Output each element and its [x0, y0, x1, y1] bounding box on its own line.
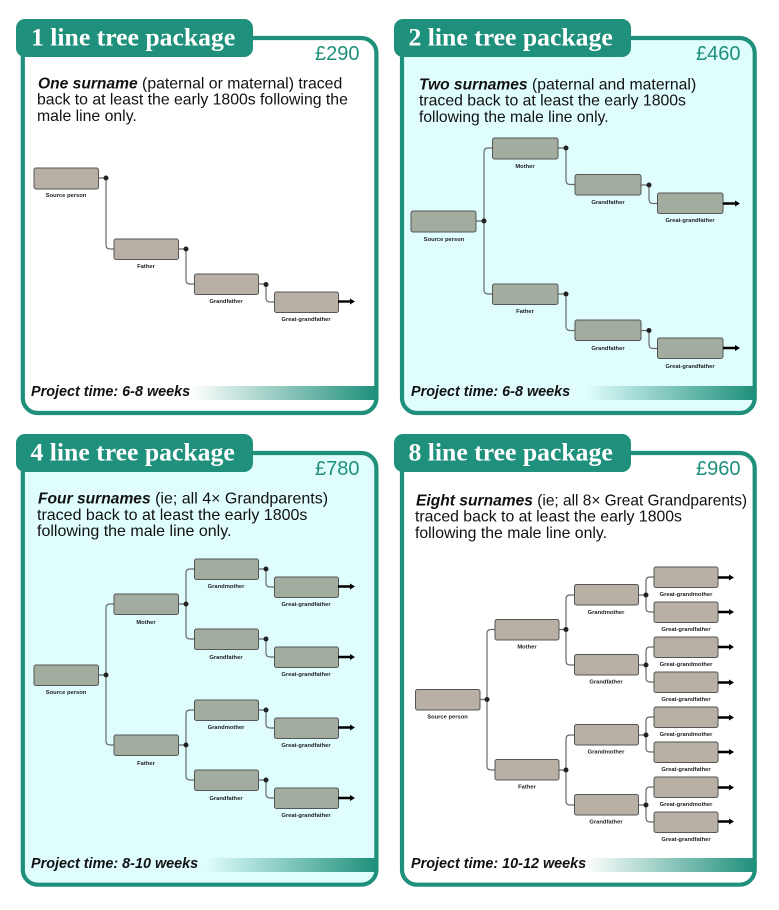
arrows [718, 574, 734, 824]
person: great-grandmother: Great-grandmother [660, 592, 713, 598]
person: father [492, 284, 558, 315]
heading tab: 2 line tree package [408, 22, 613, 52]
person: father [114, 239, 178, 270]
heading tab: 8 line tree package [408, 438, 613, 466]
person: source [416, 690, 480, 720]
description: Four surnames (ie; all 4× Grandparents) [38, 490, 328, 508]
panel: 2 line tree package [394, 19, 755, 413]
person: grandmother: Grandmother [208, 725, 245, 731]
person: mother: Mother [136, 620, 156, 626]
person: source: Source person [427, 714, 468, 720]
project time: Project time: 10-12 weeks [411, 856, 586, 872]
person: great-grandmother: Great-grandmother [660, 802, 713, 808]
description: back to at least the early 1800s following the [37, 92, 348, 108]
arrows [723, 200, 740, 351]
person: source [34, 665, 98, 696]
person: great-grandfather: Great-grandfather [665, 218, 715, 224]
person: great-grandfather: Great-grandfather [281, 672, 331, 678]
person: mother [495, 620, 559, 650]
person: mother [114, 594, 178, 626]
description: male line only. [37, 108, 137, 125]
arrow [338, 298, 355, 304]
person: grandfather [575, 320, 641, 352]
person: great-grandfather: Great-grandfather [661, 697, 711, 703]
person: grandfather [194, 629, 258, 661]
price: £290 [315, 43, 360, 65]
person: great-grandfather [274, 718, 338, 749]
heading tab [16, 434, 253, 472]
person: great-grandfather: Great-grandfather [281, 317, 331, 323]
description: One surname (paternal or maternal) traced [38, 76, 342, 92]
gradient bar [190, 386, 377, 400]
person: source [34, 168, 98, 199]
person: great-grandmother [654, 637, 718, 668]
person: grandfather: Grandfather [591, 346, 625, 352]
project time: Project time: 6-8 weeks [411, 384, 570, 400]
panel frame [23, 453, 376, 885]
person: great-grandmother [654, 567, 718, 598]
tree diagram [34, 168, 355, 323]
price: £780 [315, 458, 360, 480]
person: grandfather: Grandfather [589, 680, 623, 686]
person: source: Source person [46, 193, 87, 199]
person: great-grandfather [274, 647, 338, 678]
person: great-grandfather [274, 577, 338, 608]
person: great-grandmother [654, 777, 718, 808]
person: great-grandmother [654, 707, 718, 738]
person: grandmother: Grandmother [588, 750, 625, 756]
panel frame [402, 38, 755, 413]
person: father: Father [137, 264, 156, 270]
person: great-grandfather [658, 193, 723, 224]
person: great-grandfather [654, 672, 718, 703]
heading tab [394, 434, 631, 472]
price: £960 [696, 458, 740, 480]
person: mother: Mother [515, 164, 535, 170]
person: great-grandfather: Great-grandfather [661, 837, 711, 843]
price: £460 [696, 43, 740, 65]
person: grandfather [194, 770, 258, 802]
person: great-grandmother: Great-grandmother [660, 662, 713, 668]
person: great-grandfather [654, 602, 718, 633]
person: great-grandfather [274, 788, 338, 819]
person: father: Father [516, 309, 535, 315]
description: Eight surnames (ie; all 8× Great Grandparents) [416, 492, 747, 510]
person: father: Father [518, 784, 537, 790]
panel: 1 line tree package [16, 19, 377, 413]
person: source [411, 211, 476, 243]
description: traced back to at least the early 1800s [37, 507, 307, 524]
description: following the male line only. [37, 523, 231, 540]
description: Two surnames (paternal and maternal) [419, 76, 696, 94]
heading tab: 4 line tree package [30, 438, 235, 466]
person: grandmother [194, 700, 258, 731]
person: grandfather [194, 274, 258, 305]
person: great-grandfather: Great-grandfather [661, 767, 711, 773]
person: grandfather [574, 654, 638, 686]
description: following the male line only. [419, 109, 609, 126]
person: great-grandfather [654, 742, 718, 773]
person: father: Father [137, 761, 156, 767]
description: traced back to at least the early 1800s [419, 92, 686, 110]
gradient bar [585, 386, 755, 400]
person: great-grandfather [658, 338, 723, 370]
person: mother [492, 138, 558, 170]
project time: Project time: 6-8 weeks [31, 384, 190, 400]
panel frame [402, 453, 755, 885]
person: grandfather [575, 174, 641, 206]
person: grandfather: Grandfather [209, 796, 243, 802]
description: following the male line only. [415, 525, 607, 542]
person: grandfather: Grandfather [589, 820, 623, 826]
person: father [495, 760, 559, 790]
person: source: Source person [424, 237, 465, 243]
arrows [338, 584, 355, 801]
person: father [114, 735, 178, 767]
person: great-grandfather: Great-grandfather [665, 364, 715, 370]
tree diagram [411, 138, 740, 370]
person: grandmother [194, 559, 258, 590]
person: grandmother: Grandmother [588, 610, 625, 616]
person: source: Source person [46, 690, 87, 696]
heading tab: 1 line tree package [31, 22, 235, 52]
person: grandfather [574, 794, 638, 826]
panel: 4 line tree package [16, 434, 377, 885]
person: mother: Mother [517, 644, 537, 650]
gradient bar [585, 858, 755, 872]
project time: Project time: 8-10 weeks [31, 856, 198, 872]
gradient bar [205, 858, 377, 872]
person: grandmother: Grandmother [208, 584, 245, 590]
person: great-grandfather: Great-grandfather [281, 813, 331, 819]
person: grandmother [574, 584, 638, 616]
panel: 8 line tree package [394, 434, 755, 885]
heading tab [394, 19, 631, 57]
tree diagram [416, 567, 734, 843]
tree diagram [34, 559, 355, 819]
description: traced back to at least the early 1800s [415, 508, 682, 526]
person: grandfather: Grandfather [209, 655, 243, 661]
person: great-grandfather: Great-grandfather [281, 602, 331, 608]
person: grandmother [574, 724, 638, 756]
person: grandfather: Grandfather [591, 200, 625, 206]
heading tab [16, 19, 253, 57]
person: great-grandfather [654, 812, 718, 843]
person: great-grandmother: Great-grandmother [660, 732, 713, 738]
panel frame [23, 38, 376, 413]
person: great-grandfather: Great-grandfather [661, 627, 711, 633]
person: great-grandfather [274, 292, 338, 323]
person: great-grandfather: Great-grandfather [281, 743, 331, 749]
person: grandfather: Grandfather [209, 299, 243, 305]
